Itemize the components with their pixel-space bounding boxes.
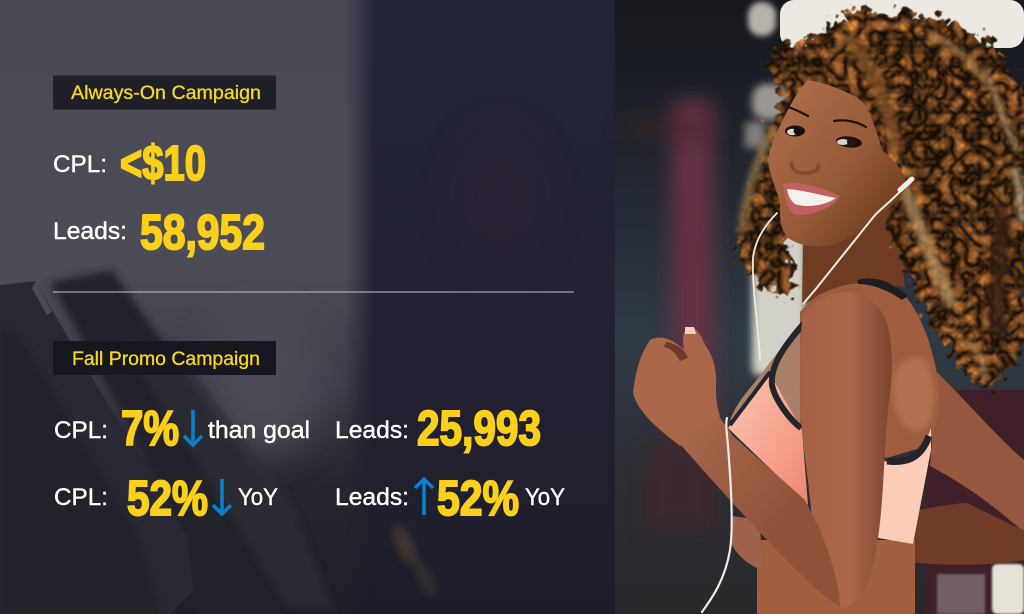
metric: 25,993 leads bbox=[335, 402, 541, 456]
treadmill blur shapes bbox=[0, 270, 335, 614]
metric: leads up 52% YoY: YoY bbox=[525, 484, 565, 511]
heading: Always-On Campaign: Always-On Campaign bbox=[71, 83, 261, 104]
icon: down arrow bbox=[184, 410, 202, 445]
icon: up arrow bbox=[415, 479, 433, 515]
hand bbox=[633, 327, 720, 446]
sports top front bbox=[728, 374, 808, 505]
metric: leads up 52% YoY: Leads: bbox=[335, 484, 409, 511]
icon: down arrow bbox=[213, 479, 231, 514]
heading: Fall Promo Campaign: Fall Promo Campaign bbox=[72, 349, 260, 370]
panel: photo background bbox=[615, 0, 1024, 614]
earphone cable bbox=[702, 179, 912, 612]
back and shoulder bbox=[800, 278, 939, 458]
metric: CPL under $10: CPL: bbox=[53, 151, 107, 178]
back forearm bbox=[905, 503, 1024, 565]
upper chest skin bbox=[730, 325, 805, 430]
sports top back bbox=[878, 428, 931, 544]
torso bbox=[757, 540, 915, 614]
metric: 58,952 leads: 58,952 bbox=[140, 206, 265, 260]
hair bbox=[730, 0, 1024, 385]
forearm bbox=[680, 412, 840, 607]
upper arm bbox=[800, 292, 892, 608]
fingers under arm bbox=[730, 516, 762, 570]
face bbox=[768, 80, 907, 247]
back arm bbox=[930, 372, 1024, 532]
heading: Fall Promo Campaign bbox=[53, 341, 276, 375]
mouth bbox=[783, 183, 840, 215]
metric: CPL 7% down than goal: than goal bbox=[208, 417, 310, 444]
hair highlights bbox=[742, 35, 1022, 378]
illustration: runner bbox=[633, 0, 1024, 614]
metric: 25,993 leads: Leads: bbox=[335, 417, 409, 444]
brows bbox=[788, 107, 866, 127]
neck strap bbox=[858, 278, 908, 300]
heading: Always-On Campaign bbox=[53, 76, 276, 110]
top straps bbox=[730, 322, 929, 462]
metric: CPL 52% down YoY: CPL: bbox=[54, 484, 108, 511]
metric: CPL 7% down than goal: CPL: bbox=[54, 417, 108, 444]
metric: CPL 7% down than goal: 7% bbox=[121, 402, 179, 456]
eyes bbox=[785, 126, 863, 149]
metric: 58,952 leads bbox=[53, 206, 265, 260]
metric: CPL 52% down YoY bbox=[54, 472, 278, 526]
divider line bbox=[53, 292, 574, 293]
metric: CPL 7% down than goal bbox=[54, 402, 310, 456]
nose shadow bbox=[792, 162, 818, 173]
metric: 25,993 leads: 25,993 bbox=[417, 402, 541, 456]
metric: CPL under $10: <$10 bbox=[120, 137, 206, 191]
metric: leads up 52% YoY: 52% bbox=[437, 472, 519, 526]
metric: 58,952 leads: Leads: bbox=[53, 218, 127, 245]
neck bbox=[802, 205, 905, 306]
metric: CPL 52% down YoY: 52% bbox=[127, 472, 208, 526]
metric: CPL under $10 bbox=[53, 137, 206, 191]
metric: leads up 52% YoY bbox=[335, 472, 565, 526]
panel: left dark background bbox=[0, 0, 615, 614]
metric: CPL 52% down YoY: YoY bbox=[238, 484, 278, 511]
